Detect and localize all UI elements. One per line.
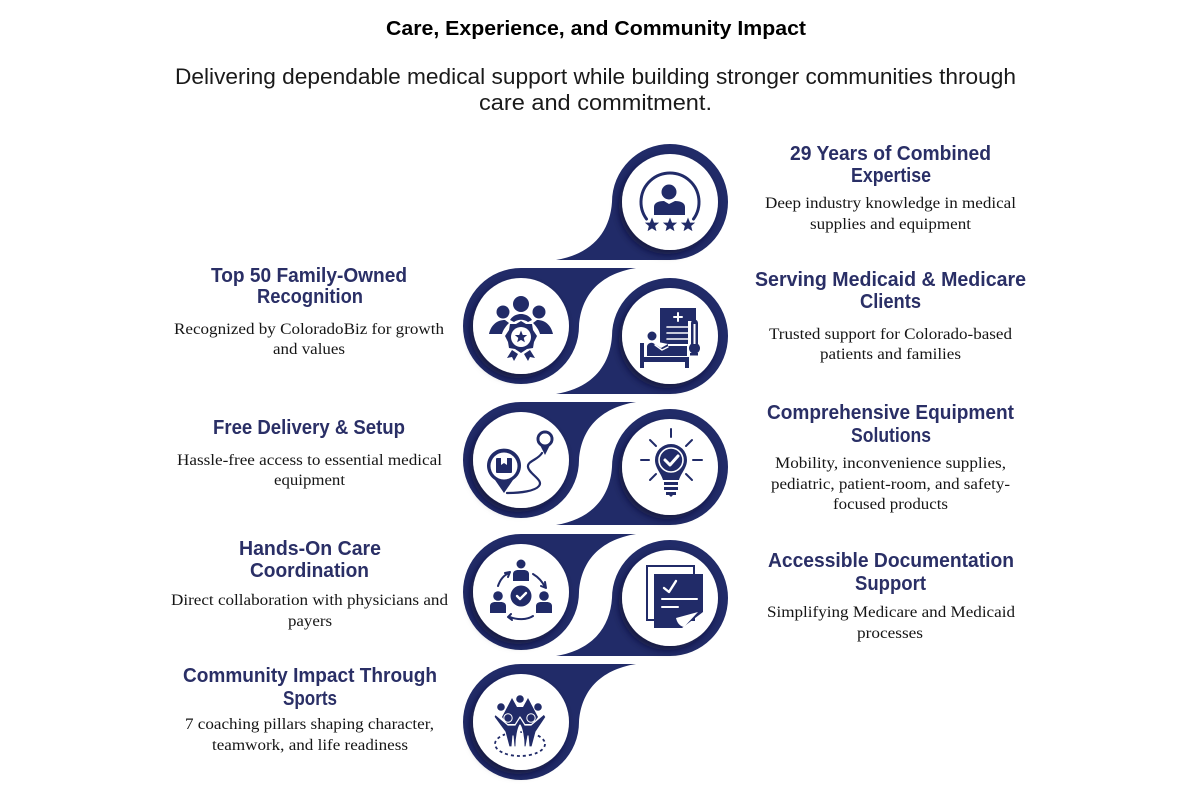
badge: comprehensive equipment solutions [556,409,728,525]
text: community impact through sports [183,665,437,754]
text: 29 years of combined expertise [765,143,1016,233]
icon: documents with check [647,566,703,628]
text: top 50 family-owned recognition [174,265,444,358]
text: accessible documentation support: Accessible Documentation [768,550,1014,572]
text: free delivery and setup: Hassle-free access to essential medical [177,452,442,469]
subtitle: Delivering dependable medical support while building stronger communities through [175,64,1016,89]
icon: expert with three stars [641,173,699,231]
text: community impact through sports: Community Impact Through [183,665,437,687]
text: accessible documentation support: Simplifying Medicare and Medicaid [767,604,1015,621]
text: free delivery and setup: equipment [274,472,346,489]
text: serving Medicaid and Medicare clients [755,269,1026,363]
text: hands-on care coordination: Direct collaboration with physicians and [171,592,448,609]
text: comprehensive equipment solutions: Solutions [851,425,931,447]
text: top 50 family-owned recognition: Recognition [257,286,363,308]
text: top 50 family-owned recognition: and values [273,341,345,358]
text: serving Medicaid and Medicare clients: Clients [860,291,921,313]
text: community impact through sports: 7 coaching pillars shaping character, [185,716,434,733]
text: hands-on care coordination [171,538,448,630]
badge: accessible documentation support [556,540,728,656]
text: community impact through sports: Sports [283,688,337,710]
text: hands-on care coordination: Coordination [250,560,369,582]
text: comprehensive equipment solutions [767,402,1014,513]
text: free delivery and setup [177,417,442,489]
text: 29 years of combined expertise: Deep industry knowledge in medical [765,195,1016,212]
text: comprehensive equipment solutions: Comprehensive Equipment [767,402,1014,424]
title: Care, Experience, and Community Impact [386,18,806,40]
badge: community impact through sports [463,664,636,780]
subtitle: care and commitment. [479,90,712,115]
text: serving Medicaid and Medicare clients: patients and families [820,346,961,363]
text: accessible documentation support [767,550,1015,642]
text: accessible documentation support: Support [855,573,926,595]
text: 29 years of combined expertise: supplies and equipment [810,216,972,233]
text: 29 years of combined expertise: Expertise [851,165,931,187]
text: comprehensive equipment solutions: pediatric, patient-room, and safety- [771,476,1010,493]
text: comprehensive equipment solutions: Mobility, inconvenience supplies, [775,455,1006,472]
text: hands-on care coordination: Hands-On Care [239,538,381,560]
badge: top 50 family-owned [463,268,636,384]
icon: light bulb with check [641,429,702,497]
icon: team cycle with check [490,560,552,620]
text: top 50 family-owned recognition: Top 50 Family-Owned [211,265,407,287]
text: serving Medicaid and Medicare clients: Serving Medicaid & Medicare [755,269,1026,291]
text: serving Medicaid and Medicare clients: Trusted support for Colorado-based [769,326,1012,343]
text: hands-on care coordination: payers [288,613,332,630]
badge: 29 years of expertise [556,144,728,260]
icon: team with raised arms [494,695,546,756]
icon: patient in bed with chart [640,308,700,368]
text: community impact through sports: teamwork, and life readiness [212,737,408,754]
text: top 50 family-owned recognition: Recognized by ColoradoBiz for growth [174,321,444,338]
badge: Medicaid and Medicare clients [556,278,728,394]
text: accessible documentation support: processes [857,625,923,642]
text: comprehensive equipment solutions: focused products [833,496,948,513]
text: free delivery and setup: Free Delivery & Setup [213,417,405,439]
text: 29 years of combined expertise: 29 Years of Combined [790,143,991,165]
icon: route with package pin [487,432,552,493]
subtitle [175,64,1016,115]
badge: hands-on care coordination [463,534,636,650]
badge: free delivery and setup [463,402,636,518]
icon: group with award rosette [489,296,553,361]
